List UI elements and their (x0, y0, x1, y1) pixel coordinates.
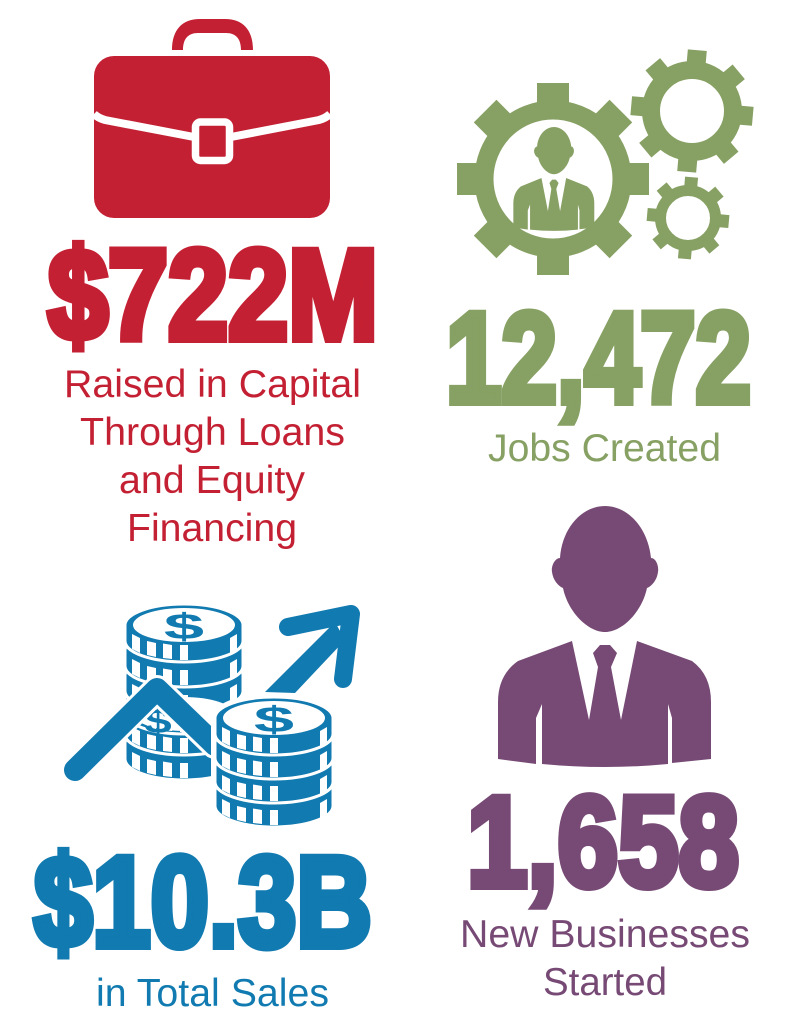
icon: small gear (647, 177, 729, 259)
icon: large gear (457, 83, 649, 275)
label: new businesses started: New Businesses (460, 913, 750, 956)
label: jobs created: Jobs Created (488, 427, 721, 470)
label: in total sales: in Total Sales (96, 972, 329, 1015)
panel: capital raised (48, 19, 378, 550)
icon: person in gear (513, 127, 594, 231)
label: raised in capital: and Equity (119, 459, 305, 502)
icon: business person (498, 506, 711, 767)
icon: back coin stack: $ (164, 607, 204, 647)
icon: front coin stack (211, 693, 337, 827)
icon: gears with person (457, 49, 754, 275)
stat: $10.3B: $10.3B (34, 831, 372, 974)
label: raised in capital: Financing (127, 507, 297, 550)
icon: medium gear (630, 49, 754, 173)
label: raised in capital (64, 363, 361, 550)
label: new businesses started: Started (543, 961, 667, 1004)
label: raised in capital: Through Loans (80, 411, 345, 454)
icon: back coin stack (125, 604, 243, 780)
icon: front coin stack: $ (254, 700, 294, 740)
label: raised in capital: Raised in Capital (64, 363, 361, 406)
stat: 1,658: 1,658 (467, 771, 739, 914)
icon: back coin stack: $ (144, 703, 172, 741)
stat: $722M: $722M (48, 224, 378, 367)
icon: coin stacks with arrow (75, 604, 351, 827)
label: new businesses started (460, 913, 750, 1004)
panel: total sales (34, 604, 372, 1015)
arrow: trend line (75, 614, 351, 770)
panel: new businesses (460, 506, 750, 1004)
panel: jobs created (446, 49, 754, 470)
icon: briefcase (94, 19, 330, 218)
